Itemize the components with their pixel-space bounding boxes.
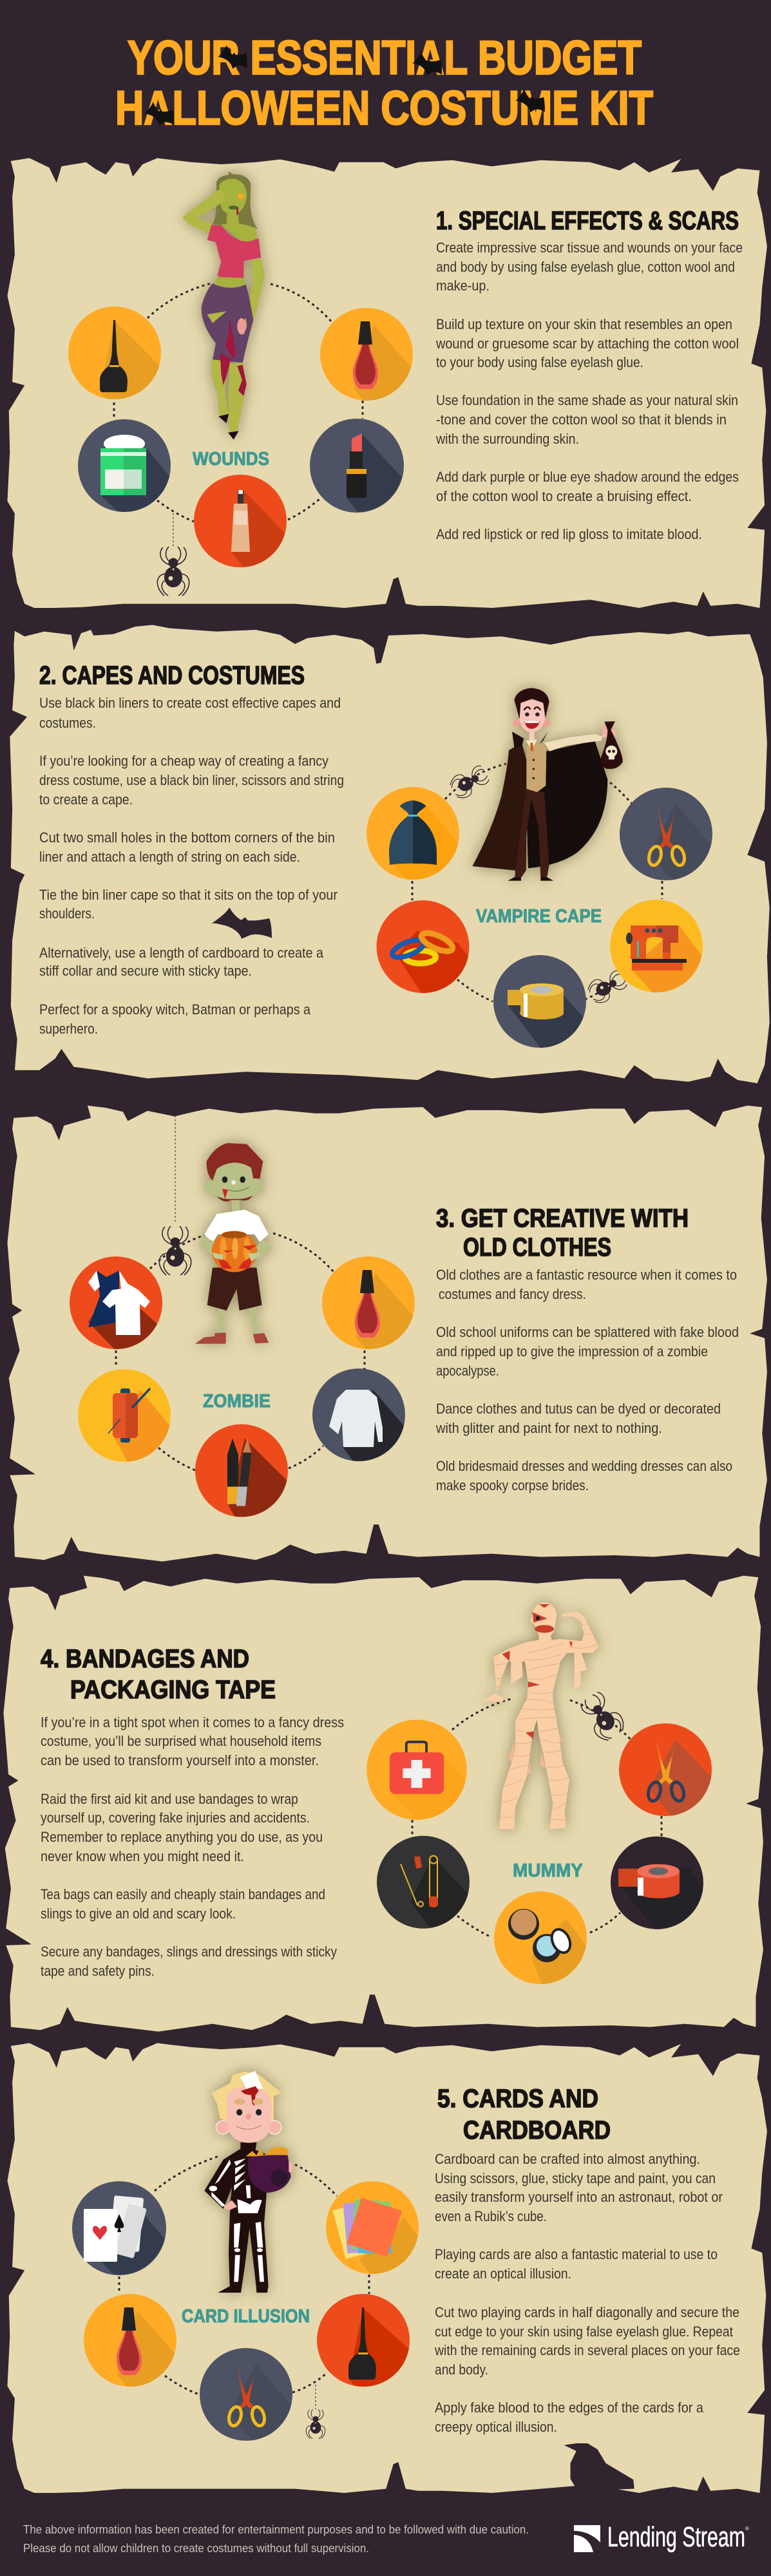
icon: wristbands (376, 900, 469, 993)
heading (437, 2085, 611, 2145)
label: mummy: MUMMY (513, 1861, 583, 1881)
character: vampire (472, 688, 623, 881)
torn paper background (7, 1106, 767, 1562)
icon: playing cards (72, 2181, 177, 2286)
body text (435, 240, 743, 542)
icon: foundation (194, 475, 287, 567)
icon: glue bottle (68, 307, 161, 399)
body text: make-up. (436, 278, 490, 294)
body text: make spooky corpse brides. (436, 1477, 589, 1493)
body text (435, 1267, 739, 1493)
body text: Tie the bin liner cape so that it sits on the top of your (39, 887, 338, 903)
icon: packaging tape (611, 1837, 715, 1941)
spider: upper left (448, 762, 491, 801)
body text: creepy optical illusion. (435, 2419, 557, 2435)
spider on thread (306, 2385, 325, 2439)
heading: PACKAGING TAPE (70, 1676, 276, 1704)
body text: stiff collar and secure with sticky tape. (39, 963, 252, 979)
icon: scissors (619, 1723, 723, 1828)
body text: yourself up, covering fake injuries and accidents. (41, 1810, 310, 1826)
body text: with the surrounding skin. (435, 431, 579, 447)
body text: Dance clothes and tutus can be dyed or decorated (436, 1401, 721, 1417)
icon: make-up compact (494, 1891, 598, 1996)
body text: and ripped up to give the impression of a zombie (436, 1343, 708, 1359)
icon: nail polish (84, 2294, 188, 2398)
icon: school uniforms (70, 1256, 162, 1349)
label: zombie: ZOMBIE (203, 1391, 271, 1412)
panel: get creative with old clothes (7, 1106, 767, 1562)
heading: OLD CLOTHES (463, 1233, 611, 1262)
heading (436, 1204, 689, 1262)
body text: Playing cards are also a fantastic material to use to (435, 2246, 718, 2262)
body text: easily transform yourself into an astronaut, robot or (435, 2189, 723, 2205)
icon: sticky tape (493, 955, 586, 1048)
body text: Cardboard can be crafted into almost anything. (435, 2151, 700, 2167)
dashed connector ring (412, 1699, 662, 1937)
icon: nail polish (320, 308, 413, 401)
icon: scissors (200, 2348, 304, 2452)
icon: sewing machine (610, 900, 703, 992)
heading: 5. CARDS AND (437, 2085, 598, 2113)
icon: thread and needle (78, 1369, 171, 1462)
body text: -tone and cover the cotton wool so that it blends in (436, 412, 727, 428)
body text: Old school uniforms can be splattered with fake blood (436, 1324, 739, 1340)
body text: costumes. (39, 715, 96, 731)
heading: 4. BANDAGES AND (41, 1645, 249, 1673)
label: card illusion: CARD ILLUSION (182, 2306, 310, 2327)
body text: superhero. (39, 1021, 98, 1037)
body text (39, 695, 344, 1037)
body text: and body. (435, 2362, 488, 2378)
dashed connector ring (114, 283, 363, 522)
title (115, 31, 653, 135)
icon: scissors (620, 788, 712, 880)
body text: If you’re in a tight spot when it comes to a fancy dress (41, 1714, 344, 1730)
character: zombie boy (195, 1143, 273, 1344)
icon: bin bag (366, 787, 459, 880)
title: HALLOWEEN COSTUME KIT (115, 81, 653, 135)
panel: special effects and scars (7, 158, 767, 608)
icon: cotton wool (78, 419, 171, 512)
spider on thread (159, 1108, 191, 1275)
body text: even a Rubik’s cube. (435, 2208, 547, 2224)
body text: wound or gruesome scar by attaching the cotton wool (435, 336, 739, 352)
body text: costumes and fancy dress. (439, 1286, 586, 1302)
decorative bat (211, 907, 272, 939)
body text (434, 2151, 740, 2435)
torn paper background (7, 158, 767, 608)
footer disclaimer: The above information has been created for entertainment purposes and to be followed with due caution. (23, 2523, 529, 2536)
panel: capes and costumes (10, 625, 770, 1083)
label: wounds: WOUNDS (193, 449, 269, 469)
icon: lab coat (312, 1368, 405, 1461)
body text: Raid the first aid kit and use bandages to wrap (41, 1791, 298, 1807)
body text: Use black bin liners to create cost effective capes and (39, 695, 341, 711)
body text: Old clothes are a fantastic resource when it comes to (436, 1267, 737, 1283)
body text: Using scissors, glue, sticky tape and paint, you can (435, 2170, 716, 2186)
body text: can be used to transform yourself into a monster. (41, 1752, 319, 1768)
body text: Remember to replace anything you do use, as you (41, 1829, 323, 1845)
character: zombie girl (182, 172, 265, 440)
body text: to your body using false eyelash glue. (436, 354, 643, 370)
heading: 3. GET CREATIVE WITH (436, 1204, 689, 1233)
body text: tape and safety pins. (41, 1963, 155, 1979)
body text: shoulders. (39, 905, 95, 922)
body text: Perfect for a spooky witch, Batman or perhaps a (39, 1001, 310, 1018)
panel: bandages and packaging tape (3, 1576, 763, 2032)
crow silhouette (564, 2443, 634, 2498)
body text: Build up texture on your skin that resembles an open (436, 316, 732, 332)
body text: to create a cape. (39, 791, 133, 808)
footer disclaimer (23, 2523, 529, 2555)
body text: apocalypse. (436, 1363, 499, 1379)
body text: liner and attach a length of string on each side. (39, 849, 300, 865)
icon: lipstick (310, 419, 404, 513)
title: YOUR ESSENTIAL BUDGET (128, 31, 642, 84)
torn paper background (3, 1576, 763, 2032)
spider: lower right (585, 967, 629, 1006)
body text: never know when you might need it. (41, 1848, 244, 1864)
heading (41, 1645, 276, 1704)
label: vampire cape: VAMPIRE CAPE (476, 906, 602, 927)
torn paper background (7, 2043, 767, 2493)
torn paper background (10, 625, 770, 1083)
body text (41, 1714, 344, 1979)
body text: of the cotton wool to create a bruising effect. (436, 488, 692, 504)
body text: dress costume, use a black bin liner, scissors and string (39, 772, 344, 788)
body text: Secure any bandages, slings and dressings with sticky (41, 1944, 338, 1960)
spider (576, 1689, 628, 1744)
body text: slings to give an old and scary look. (41, 1906, 236, 1922)
icon: coloured paper (326, 2181, 430, 2286)
body text: If you’re looking for a cheap way of creating a fancy (39, 753, 329, 769)
character: mummy (483, 1602, 598, 1829)
icon: nail polish (322, 1256, 415, 1349)
spider on thread (157, 513, 189, 596)
body text: with glitter and paint for next to nothing. (435, 1420, 662, 1436)
body text: Alternatively, use a length of cardboard to create a (39, 945, 323, 961)
body text: Add red lipstick or red lip gloss to imitate blood. (436, 526, 702, 542)
character: skeleton boy (204, 2071, 292, 2293)
icon: glue bottle (317, 2294, 421, 2398)
icon: make-up pencils (195, 1425, 288, 1517)
footer disclaimer: Please do not allow children to create costumes without full supervision. (23, 2542, 369, 2555)
body text: Tea bags can easily and cheaply stain bandages and (41, 1886, 325, 1902)
dashed connector ring (412, 764, 662, 1001)
heading: 2. CAPES AND COSTUMES (39, 661, 305, 690)
body text: Apply fake blood to the edges of the cards for a (435, 2400, 703, 2416)
body text: Cut two small holes in the bottom corners of the bin (39, 829, 335, 846)
logo: lending stream: ® (745, 2526, 749, 2532)
panel: cards and cardboard (7, 2043, 767, 2498)
dashed connector ring (119, 2156, 369, 2394)
heading: CARDBOARD (463, 2116, 611, 2145)
icon: first aid kit (366, 1719, 479, 1832)
icon: safety pins (377, 1836, 481, 1940)
body text: create an optical illusion. (435, 2266, 571, 2282)
dashed connector ring (116, 1233, 365, 1470)
body text: costume, you’ll be surprised what household items (41, 1733, 321, 1749)
